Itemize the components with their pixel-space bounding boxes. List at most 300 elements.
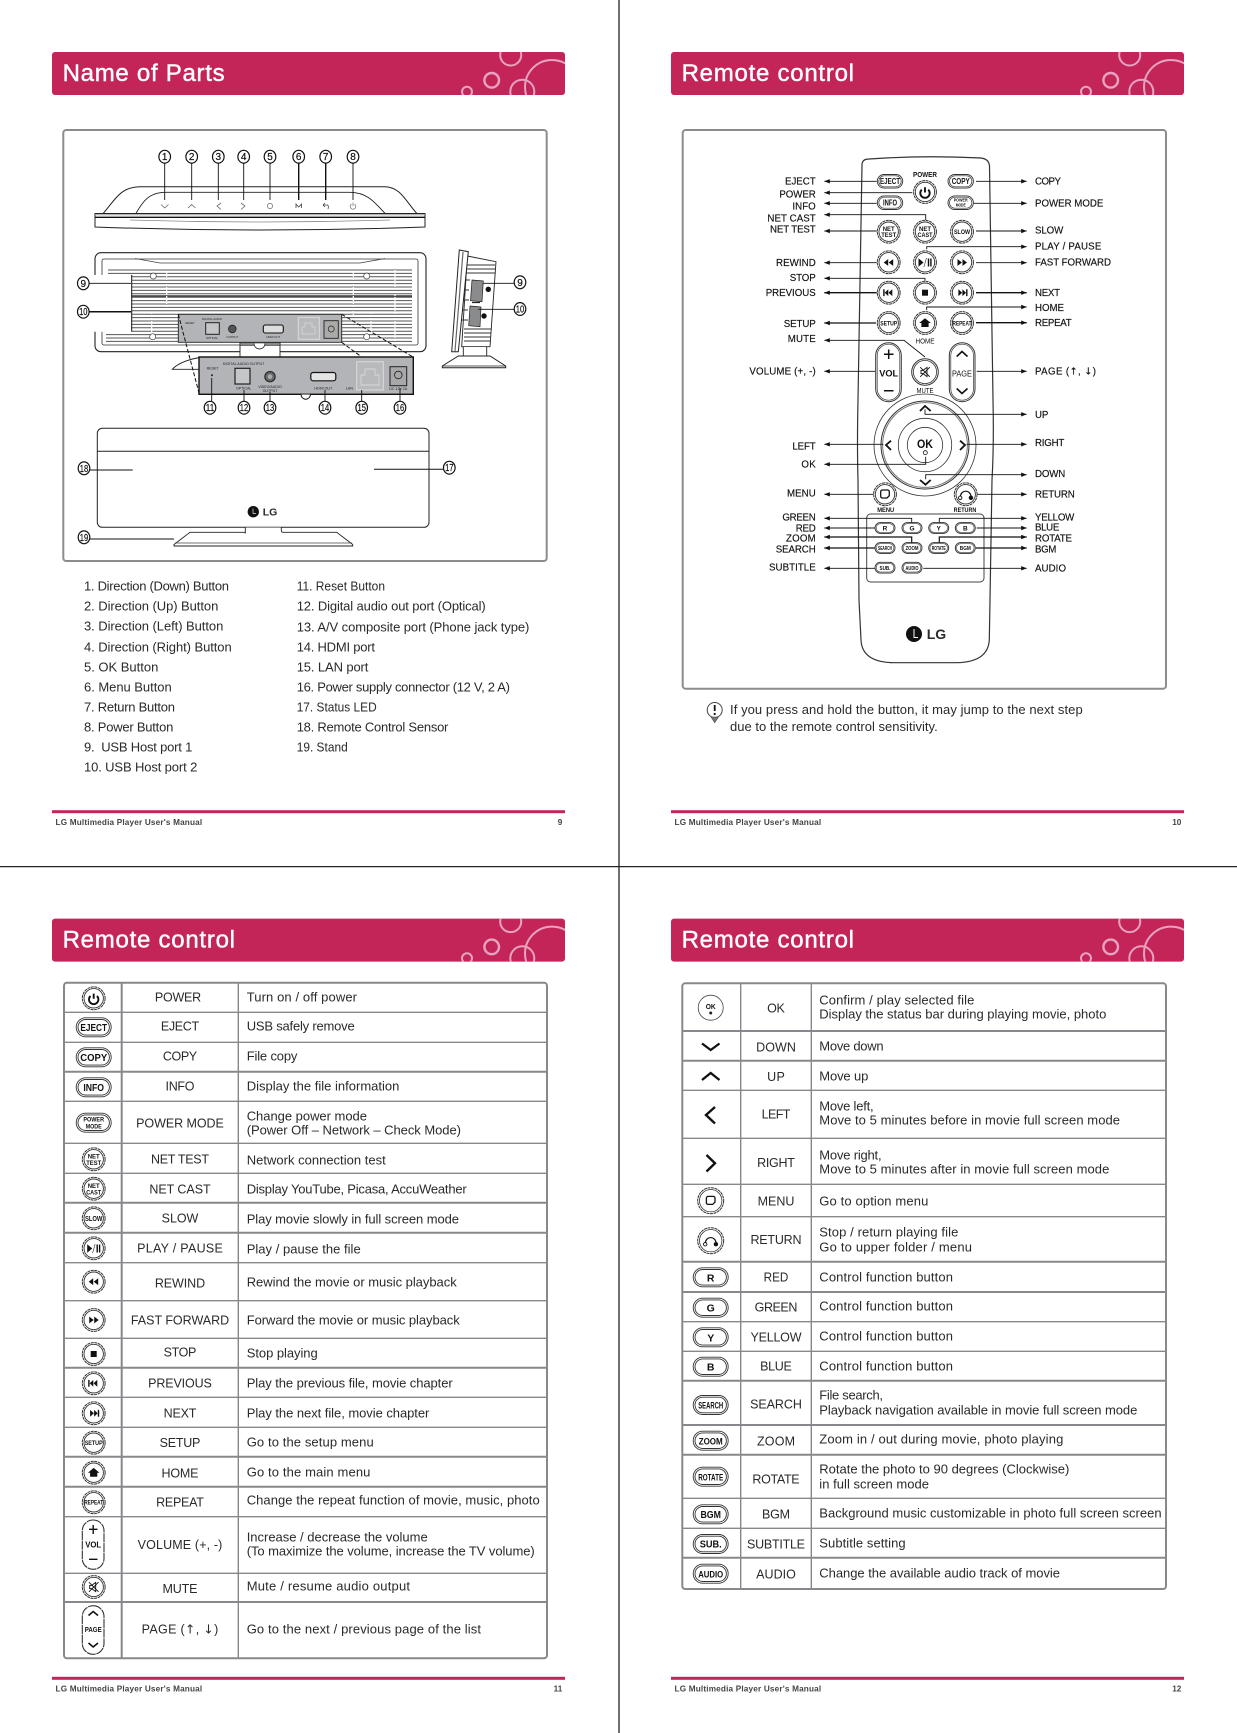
table: remote control functions part 1 (64, 983, 547, 1658)
row: SLOW: SLOW (162, 1211, 199, 1225)
row: INFO: INFO (166, 1079, 195, 1093)
callout numbers 1 to 8: 6 (296, 152, 302, 163)
callout: SEARCH (776, 543, 895, 556)
row: LEFT: LEFT (762, 1107, 791, 1121)
callout: ZOOM: ZOOM (786, 534, 816, 545)
row: OK: Confirm / play selected file (819, 993, 974, 1008)
callout: REWIND: REWIND (776, 258, 816, 269)
callout: SUBTITLE: SUBTITLE (769, 563, 816, 574)
callout: MENU (787, 483, 896, 514)
large port panel: DIGITAL AUDIO OUTPUT (223, 362, 265, 366)
callout: HOME (914, 303, 1065, 346)
list: parts 1 to 10: 8. Power Button (84, 719, 173, 734)
control: OK direction wheel: OK (917, 437, 933, 451)
row: PREVIOUS: PREVIOUS (148, 1376, 212, 1390)
note: press and hold: due to the remote control sensitivity. (730, 719, 938, 734)
callout: PAGE (949, 343, 1096, 402)
icon: warning bulb (707, 702, 722, 723)
list: parts 11 to 19: 15. LAN port (297, 659, 369, 674)
row: FAST FORWARD: FAST FORWARD (131, 1313, 229, 1327)
page 12: remote control table continued (671, 911, 1198, 1694)
row: POWER MODE: POWER MODE (136, 1116, 224, 1130)
footer: page 12 (671, 1677, 1184, 1694)
callout: RED: RED (796, 524, 816, 535)
diagram: rear view of device (94, 253, 426, 399)
list: parts 11 to 19: 17. Status LED (297, 699, 377, 714)
row: VOLUME: (To maximize the volume, increase the TV volume) (247, 1543, 535, 1558)
callout: PREVIOUS (766, 281, 900, 304)
callout: REPEAT: REPEAT (1035, 318, 1072, 329)
row: RETURN: Stop / return playing file (819, 1225, 958, 1240)
callout: DOWN: DOWN (1035, 469, 1065, 480)
callout: MUTE: MUTE (788, 334, 816, 345)
icon: SUB button (693, 1534, 728, 1554)
row: BGM (693, 1505, 1162, 1524)
row: RETURN: Go to upper folder / menu (819, 1240, 972, 1255)
callout numbers 1 to 8: 3 (216, 152, 222, 163)
callout: EJECT (785, 174, 903, 188)
stand (240, 342, 280, 358)
footer: page 10: LG Multimedia Player User's Manual (674, 818, 821, 827)
callout: AUDIO: AUDIO (906, 566, 918, 572)
small port panel: OUTPUT (227, 335, 238, 339)
row: ZOOM: Zoom in / out during movie, photo playing (819, 1432, 1063, 1447)
icon: eject button: EJECT (80, 1023, 107, 1034)
callout: SEARCH: SEARCH (776, 545, 816, 556)
title banner: Remote control: Remote control (682, 60, 854, 87)
row: YELLOW: Control function button (819, 1329, 953, 1344)
footer: page 11: 11 (554, 1685, 563, 1694)
callout: YELLOW (929, 513, 1075, 533)
list: parts 11 to 19: 18. Remote Control Sensor (297, 719, 449, 734)
row: MENU: Go to option menu (819, 1194, 928, 1209)
callout numbers 9 and 10 right (478, 276, 526, 316)
row: NET TEST: NET TEST (151, 1152, 209, 1166)
icon: power button (82, 987, 105, 1010)
icon: B button (693, 1357, 728, 1376)
callout: LEFT: LEFT (792, 442, 816, 453)
control: OK direction wheel (874, 394, 976, 496)
row: STOP: Stop playing (247, 1345, 318, 1360)
footer: page 10: 10 (1172, 818, 1182, 827)
callout: FAST FORWARD: FAST FORWARD (1035, 258, 1111, 269)
icon: copy button: COPY (80, 1053, 108, 1064)
icon: zoom button: ZOOM (699, 1436, 723, 1447)
icon: setup button: SETUP (85, 1440, 103, 1447)
row: RED: RED (764, 1270, 788, 1284)
footer: page 12: 12 (1172, 1685, 1182, 1694)
icon: repeat button (82, 1491, 105, 1514)
row: REWIND (82, 1270, 457, 1293)
callout numbers 1 to 8 (159, 150, 359, 200)
callout: POWER: POWER (779, 189, 816, 200)
icon: audio button (693, 1564, 728, 1583)
panel: color and function buttons (867, 514, 984, 582)
row: STOP: STOP (164, 1345, 196, 1359)
callout numbers 1 to 8: 7 (323, 152, 329, 163)
callout: SUBTITLE: SUB. (880, 566, 891, 572)
row: SLOW: Play movie slowly in full screen mode (247, 1212, 459, 1227)
row: COPY (76, 1048, 298, 1067)
note: press and hold: If you press and hold the button, it may jump to the next step (730, 702, 1083, 717)
footer: page 9: 9 (558, 818, 563, 827)
row: EJECT: EJECT (161, 1019, 200, 1033)
row: PAGE (82, 1606, 481, 1654)
callout: VOLUME: VOLUME (+, -) (749, 367, 816, 378)
callout: NET TEST (770, 220, 900, 243)
callout: MENU: MENU (787, 489, 816, 500)
row: LEFT (706, 1099, 1120, 1128)
row: POWER MODE: Change power mode (247, 1109, 367, 1124)
callout: POWER MODE (948, 196, 1104, 210)
icon: Y button: Y (707, 1332, 714, 1344)
large port panel: RESET (207, 366, 219, 370)
callout numbers 9 and 10 left: 10 (79, 307, 88, 318)
logo: LG (248, 506, 277, 518)
row: RED (693, 1268, 953, 1287)
icon: setup button (82, 1431, 105, 1454)
callout: HOME: HOME (1035, 303, 1065, 314)
title banner: Remote control: Remote control (682, 927, 854, 954)
callout: BGM: BGM (1035, 545, 1056, 556)
USB area cut-out (94, 275, 132, 332)
icon: info button: INFO (83, 1083, 104, 1094)
row: POWER: Turn on / off power (247, 989, 358, 1004)
row: BLUE: Control function button (819, 1359, 953, 1374)
icon: audio button: AUDIO (698, 1569, 723, 1580)
row: SUBTITLE (693, 1534, 906, 1554)
callout: POWER (779, 170, 937, 203)
row: HOME: Go to the main menu (247, 1464, 370, 1479)
callout: GREEN (782, 513, 922, 533)
row: PLAY / PAUSE: PLAY / PAUSE (137, 1241, 223, 1255)
large port panel: OUTPUT (263, 389, 278, 393)
callout: BLUE (955, 523, 1060, 534)
callout: RETURN (954, 483, 1075, 514)
diagram: side view of device (442, 250, 506, 368)
icon: OK button: OK (706, 1002, 716, 1011)
row: SETUP: Go to the setup menu (247, 1434, 374, 1449)
page 9: name of parts (52, 44, 579, 827)
row: NEXT (82, 1402, 430, 1425)
row: NET TEST: Network connection test (247, 1152, 386, 1167)
row: AUDIO: AUDIO (756, 1567, 796, 1581)
page 11: remote control table (52, 911, 579, 1694)
callout: PAGE: PAGE (↑, ↓) (1035, 367, 1096, 378)
callout: VOLUME (749, 343, 901, 402)
icon: R button: R (707, 1272, 715, 1284)
small port panel: HDMI OUT (266, 335, 281, 339)
large port panel: VIDEO/AUDIO (258, 385, 282, 389)
row: RETURN (698, 1225, 972, 1255)
row: MUTE: MUTE (162, 1582, 198, 1596)
callout: SETUP: SETUP (880, 320, 897, 327)
callout numbers 9 and 10 right: 10 (516, 304, 525, 316)
callout: INFO (792, 196, 903, 213)
list: parts 1 to 10: 6. Menu Button (84, 679, 172, 694)
large port panel: LAN (346, 386, 353, 390)
row: PAGE: PAGE (↑, ↓) (142, 1621, 218, 1636)
row: UP: UP (767, 1070, 785, 1084)
list: parts 1 to 10: 1. Direction (Down) Button (84, 578, 229, 593)
callout: RIGHT: RIGHT (1035, 438, 1064, 449)
callout: REPEAT (951, 312, 1072, 334)
logo: LG on remote: LG (927, 626, 946, 642)
small port panel: DIGITAL AUDIO (202, 317, 223, 321)
row: OK: OK (767, 1001, 786, 1015)
row: YELLOW: YELLOW (750, 1330, 802, 1344)
callout: MUTE: MUTE (916, 386, 934, 395)
callout numbers 11 to 16 (204, 378, 406, 414)
callout: GREEN: G (909, 526, 915, 532)
callout: ZOOM: ZOOM (906, 546, 918, 552)
callout numbers 17 to 19 (78, 461, 455, 544)
list: parts 1 to 10: 5. OK Button (84, 659, 158, 674)
row: SEARCH (693, 1388, 1137, 1418)
icon: net test button (82, 1148, 105, 1171)
list: parts 11 to 19: 16. Power supply connector (12 V, 2 A) (297, 679, 510, 694)
callout: ROTATE (929, 534, 1073, 553)
row: STOP (82, 1343, 318, 1365)
icon: OK button (698, 995, 723, 1020)
row: MUTE (82, 1576, 410, 1598)
row: MUTE: Mute / resume audio output (247, 1579, 410, 1594)
dashed zoom lines (178, 314, 413, 393)
callout: SETUP: SETUP (784, 319, 816, 330)
icon: copy button (76, 1048, 111, 1067)
icon: next button (82, 1402, 105, 1425)
row: BGM: Background music customizable in photo full screen screen (819, 1505, 1162, 1520)
callout: INFO: INFO (792, 202, 816, 213)
icon: net test button: TEST (86, 1160, 102, 1167)
footer: page 12: LG Multimedia Player User's Manual (674, 1685, 821, 1694)
row: VOLUME: Increase / decrease the volume (247, 1529, 428, 1544)
row: BLUE: BLUE (760, 1360, 792, 1374)
callout: SLOW (951, 220, 1064, 243)
row: AUDIO: Change the available audio track of movie (819, 1565, 1060, 1580)
row: HOME (82, 1461, 370, 1484)
row: SLOW (82, 1207, 459, 1230)
row: ZOOM (693, 1431, 1063, 1450)
callout: PLAY / PAUSE (914, 242, 1102, 274)
title banner: Remote control (671, 911, 1198, 981)
callout: ZOOM (786, 534, 922, 553)
row: ROTATE: ROTATE (752, 1472, 800, 1486)
icon: BGM button: BGM (700, 1510, 721, 1521)
icon: search button: SEARCH (698, 1401, 723, 1412)
icon: stop button (82, 1343, 105, 1365)
logo: LG: LG (263, 506, 277, 518)
list: parts 1 to 10: 9. USB Host port 1 (84, 739, 192, 754)
row: DOWN: Move down (819, 1039, 884, 1054)
callout: NET TEST: NET TEST (770, 225, 816, 236)
icon: SUB button: SUB. (700, 1540, 722, 1551)
row: RED: Control function button (819, 1269, 953, 1284)
icon: G button: G (707, 1303, 715, 1315)
callout: DOWN (926, 469, 1065, 480)
small port panel: OPTICAL (206, 336, 218, 340)
row: PREVIOUS: Play the previous file, movie chapter (247, 1375, 453, 1390)
title banner: Remote control: Remote control (63, 927, 235, 954)
row: OK (698, 993, 1106, 1022)
callout numbers 11 to 16: 12 (240, 403, 249, 414)
icon: menu button (698, 1188, 724, 1214)
icon: page pill button (82, 1606, 104, 1654)
row: NEXT: NEXT (164, 1406, 197, 1420)
row: POWER MODE: (Power Off – Network – Check Mode) (247, 1122, 461, 1137)
title banner: Name of Parts: Name of Parts (63, 60, 225, 87)
icon: up chevron (702, 1073, 720, 1080)
callout: UP (925, 409, 1048, 421)
callout: REWIND (776, 251, 900, 274)
callout numbers 9 and 10 left (78, 277, 131, 318)
list: parts 11 to 19: 13. A/V composite port (Phone jack type) (297, 619, 529, 634)
callout: SETUP (784, 312, 900, 334)
list: parts 1 to 10: 7. Return Button (84, 699, 175, 714)
callout: NET CAST: NET CAST (767, 214, 816, 225)
row: INFO (76, 1078, 399, 1097)
panel: device diagrams (63, 130, 547, 561)
diagram: front view of device (97, 428, 429, 546)
icon: fast forward button (82, 1309, 105, 1331)
callout: NEXT: NEXT (1035, 288, 1060, 299)
callout: SLOW: SLOW (1035, 226, 1064, 237)
callout: MENU: MENU (877, 507, 894, 514)
callout numbers 17 to 19: 19 (80, 533, 89, 544)
callout: EJECT: EJECT (880, 177, 900, 186)
callout: BLUE: BLUE (1035, 523, 1060, 534)
icon: left chevron (706, 1107, 715, 1124)
row: GREEN: GREEN (755, 1300, 797, 1314)
row: NET CAST (82, 1177, 467, 1200)
row: REPEAT (82, 1491, 540, 1514)
callout: PREVIOUS: PREVIOUS (766, 288, 816, 299)
callout numbers 9 and 10 left: 9 (81, 279, 87, 290)
row: POWER: POWER (155, 990, 201, 1004)
icon: B button: B (707, 1362, 715, 1374)
row: FAST FORWARD (82, 1309, 460, 1331)
callout: RETURN: RETURN (1035, 490, 1075, 501)
row: ROTATE (693, 1462, 1069, 1492)
row: DOWN: DOWN (756, 1040, 796, 1054)
list: parts 11 to 19: 14. HDMI port (297, 639, 375, 654)
list: parts 1 to 10: 10. USB Host port 2 (84, 759, 197, 774)
callout: POWER MODE: POWER (954, 198, 968, 202)
row: PAGE: Go to the next / previous page of the list (247, 1621, 481, 1636)
row: RETURN: RETURN (750, 1233, 802, 1247)
callout numbers 11 to 16: 16 (396, 403, 405, 414)
row: RIGHT: Move to 5 minutes after in movie full screen mode (819, 1162, 1109, 1177)
callout numbers 1 to 8: 2 (189, 152, 195, 163)
callout: YELLOW: Y (937, 526, 942, 532)
callout: RIGHT (967, 438, 1064, 449)
callout: RED: R (883, 526, 888, 532)
callout: STOP (790, 273, 936, 304)
callout numbers 1 to 8: 8 (350, 152, 356, 163)
row: EJECT: USB safely remove (247, 1018, 355, 1033)
large port panel: HDMI OUT (314, 386, 333, 390)
row: SETUP: SETUP (160, 1436, 200, 1450)
icon: power mode button (76, 1113, 111, 1132)
callout: AUDIO (902, 562, 1066, 575)
callout: POWER: POWER (913, 170, 937, 179)
row: NET TEST (82, 1148, 386, 1171)
row: ROTATE: in full screen mode (819, 1477, 929, 1492)
callout: ROTATE: ROTATE (932, 546, 946, 552)
icon: Y button (693, 1328, 728, 1347)
callout numbers 17 to 19: 17 (445, 463, 454, 474)
row: BGM: BGM (762, 1507, 790, 1521)
callout: OK: OK (801, 460, 816, 471)
callout: PLAY / PAUSE: PLAY / PAUSE (1035, 242, 1102, 253)
icon: rewind button (82, 1270, 105, 1293)
callout: LEFT (792, 442, 883, 453)
remote body outline (858, 157, 993, 663)
row: MENU (698, 1188, 928, 1214)
row: PLAY / PAUSE: Play / pause the file (247, 1241, 361, 1256)
icon: slow button (82, 1207, 105, 1230)
panel: remote control diagram (683, 130, 1166, 689)
icon: info button (76, 1078, 111, 1097)
callout: EJECT: EJECT (785, 177, 816, 188)
callout: NET CAST: NET (919, 226, 931, 233)
row: SUBTITLE: Subtitle setting (819, 1535, 906, 1550)
row: UP (702, 1069, 868, 1084)
callout: STOP: STOP (790, 273, 816, 284)
callout: NET TEST: TEST (881, 232, 896, 239)
callout: UP: UP (1035, 410, 1048, 421)
row: FAST FORWARD: Forward the movie or music playback (247, 1312, 460, 1327)
row: PLAY / PAUSE (82, 1237, 361, 1260)
row: VOLUME (82, 1520, 535, 1569)
callout: NEXT (951, 281, 1060, 304)
footer: page 11 (52, 1677, 565, 1694)
icon: rotate button (693, 1467, 728, 1486)
row: COPY: COPY (163, 1049, 198, 1063)
title banner: Remote control (52, 911, 579, 981)
row: RIGHT (706, 1148, 1109, 1177)
list: parts 11 to 19 (297, 578, 529, 754)
icon: page pill button: PAGE (85, 1627, 102, 1634)
row: REWIND: REWIND (155, 1276, 205, 1290)
callout numbers 11 to 16: 11 (206, 403, 215, 414)
row: YELLOW (693, 1328, 953, 1347)
icon: play pause button (82, 1237, 105, 1260)
icon: net test button: NET (88, 1154, 100, 1161)
row: REWIND: Rewind the movie or music playback (247, 1274, 457, 1289)
title banner: Name of Parts (52, 44, 579, 114)
icon: return button (698, 1228, 724, 1254)
page 10: remote control diagram (671, 44, 1198, 827)
callout numbers 1 to 8: 4 (241, 152, 247, 163)
callout: VOLUME: VOL (879, 368, 898, 379)
large port panel: OPTICAL (236, 386, 251, 390)
row: SEARCH: Playback navigation available in movie full screen mode (819, 1403, 1137, 1418)
small port panel (178, 314, 342, 342)
row: POWER MODE (76, 1109, 461, 1137)
row: SEARCH: File search, (819, 1388, 883, 1403)
callout: FAST FORWARD (951, 251, 1111, 274)
row: REPEAT: Change the repeat function of movie, music, photo (247, 1493, 540, 1508)
icon: net cast button: NET (88, 1183, 100, 1190)
icon: search button (693, 1396, 728, 1414)
callout: INFO: INFO (883, 199, 897, 208)
row: RIGHT: RIGHT (757, 1156, 795, 1170)
list: parts 1 to 10: 4. Direction (Right) Button (84, 639, 232, 654)
row: UP: Move up (819, 1069, 868, 1084)
icon: zoom button (693, 1431, 728, 1450)
callout: NET CAST: CAST (918, 232, 933, 239)
